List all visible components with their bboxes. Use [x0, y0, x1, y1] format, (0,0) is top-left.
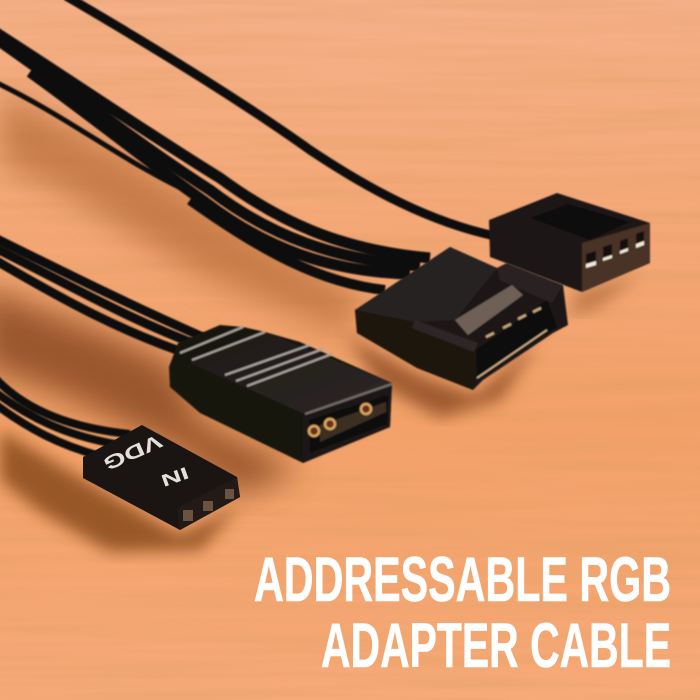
printed label VDG: VDG [100, 429, 165, 474]
cables [0, 0, 495, 456]
printed label IN: IN [158, 463, 191, 490]
socket holes [586, 231, 644, 268]
shadows on the table [0, 90, 640, 552]
RGB connector [169, 325, 392, 463]
dupont IN connector [83, 425, 240, 530]
title [254, 545, 671, 681]
4-pin fan connector [489, 193, 650, 292]
molex style connector [355, 247, 568, 390]
